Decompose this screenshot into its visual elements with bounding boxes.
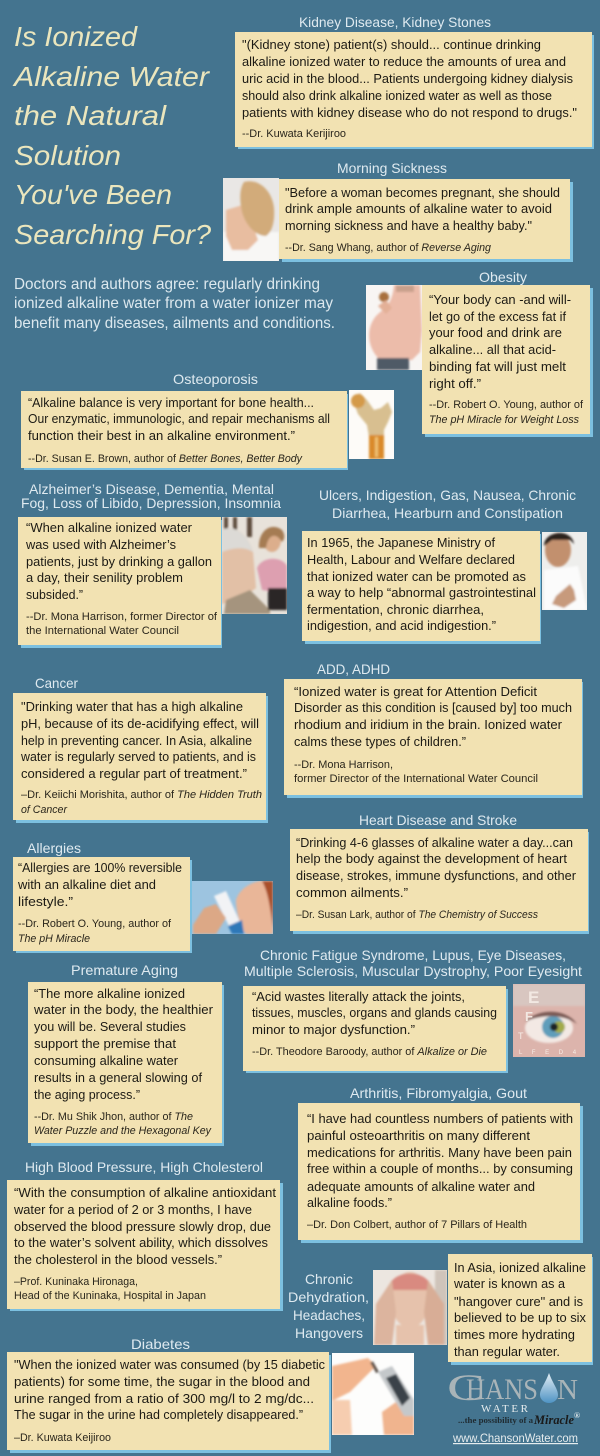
photo: woman with headache (373, 1270, 447, 1345)
logo: Chanson Water: WATER (481, 1403, 531, 1415)
photo: overweight man (366, 285, 422, 370)
quote: diabetes: "When the ionized water was consumed (by 15 diabetic (14, 1357, 325, 1372)
quote: chronic fatigue: minor to major dysfunction.” (252, 1022, 415, 1037)
quote: kidney disease: --Dr. Kuwata Kerijiroo (242, 128, 346, 140)
panel: osteoporosis (21, 371, 394, 470)
quote: premature aging: support the premise that (34, 1036, 176, 1051)
photo: eye with letter chart: E (528, 988, 539, 1007)
quote: heart disease: “Drinking 4-6 glasses of alkaline water a day...can (296, 835, 573, 850)
quote: diabetes: patients) for some time, the sugar in the blood and (14, 1374, 310, 1389)
heading: ulcers: Ulcers, Indigestion, Gas, Nausea, Chronic (319, 487, 576, 503)
heading: chronic dehydration: Chronic (305, 1271, 353, 1287)
quote: osteoporosis (28, 395, 330, 465)
panel: cancer (13, 675, 268, 823)
quote: ulcers: indigestion, and acid indigestion.” (307, 618, 496, 633)
quote: alzheimer's (25, 520, 218, 637)
quote: high blood pressure: to the water’s solvent ability, which dissolves (14, 1235, 268, 1250)
website link: www.ChansonWater.com (452, 1431, 578, 1445)
quote: high blood pressure (13, 1185, 276, 1302)
panel: premature aging (28, 962, 224, 1146)
quote: arthritis: painful osteoarthritis on many different (307, 1128, 530, 1143)
quote: ulcers (307, 535, 536, 633)
heading: ADD, ADHD: ADD, ADHD (317, 661, 390, 677)
quote: morning sickness (285, 185, 560, 254)
quote: osteoporosis: Our enzymatic, immunologic, and repair mechanisms all (28, 411, 330, 426)
title: Solution (14, 140, 121, 171)
quote: alzheimer's: the International Water Council (26, 625, 179, 637)
quote: premature aging: results in a general slowing of (34, 1070, 202, 1085)
panel: chronic fatigue (243, 947, 585, 1073)
panel: morning sickness (223, 160, 573, 262)
quote: high blood pressure: “With the consumption of alkaline antioxidant (14, 1185, 276, 1200)
heading: alzheimer's (21, 481, 281, 511)
heading: chronic dehydration: Dehydration, (288, 1289, 369, 1305)
quote: cancer: "Drinking water that has a high alkaline (21, 699, 243, 714)
logo: Chanson Water: C (447, 1368, 485, 1409)
quote: heart disease: –Dr. Susan Lark, author of The Chemistry of Success (296, 909, 538, 921)
heading: osteoporosis: Osteoporosis (173, 371, 258, 387)
quote: obesity (429, 292, 584, 426)
logo: Chanson Water: Miracle (533, 1412, 574, 1427)
quote: morning sickness: drink ample amounts of alkaline water to avoid (285, 201, 552, 216)
heading: obesity: Obesity (479, 269, 527, 285)
heading: alzheimer's: Alzheimer’s Disease, Dementia, Mental (29, 481, 274, 497)
title (12, 21, 211, 250)
quote: premature aging: --Dr. Mu Shik Jhon, author of The (34, 1111, 193, 1123)
quote: ADD, ADHD: rhodium and iridium in the brain. Ionized water (294, 717, 563, 732)
quote: ulcers: a way to help “abnormal gastrointestinal (307, 585, 536, 600)
heading: cancer: Cancer (35, 675, 78, 691)
intro text: Doctors and authors agree: regularly drinking (14, 276, 320, 293)
quote: morning sickness: "Before a woman becomes pregnant, she should (285, 185, 560, 200)
callout: hangover cure (453, 1260, 586, 1359)
photo: femur bone (349, 390, 394, 459)
icon: water drop (540, 1373, 558, 1403)
quote: high blood pressure: water for a period of 2 or 3 months, I have (13, 1202, 252, 1217)
panel: ulcers (302, 487, 587, 644)
quote: cancer: water is regularly served to patients, and is (20, 749, 256, 764)
panel: ADD, ADHD (284, 661, 583, 798)
heading: allergies: Allergies (27, 840, 81, 856)
quote: ADD, ADHD: calms these types of children.” (294, 734, 466, 749)
quote: osteoporosis: “Alkaline balance is very important for bone health... (28, 395, 314, 410)
quote: heart disease: common ailments.” (296, 885, 408, 900)
quote: osteoporosis: function their best in an alkaline environment.” (28, 428, 295, 443)
callout: hangover cure: than regular water. (454, 1344, 560, 1359)
quote: morning sickness: morning sickness and have a healthy baby." (285, 218, 532, 233)
quote: obesity: let go of the excess fat if (429, 309, 566, 324)
quote: alzheimer's: “When alkaline ionized water (26, 520, 193, 535)
heading: arthritis: Arthritis, Fibromyalgia, Gout (350, 1085, 527, 1101)
quote: alzheimer's: a day, their senility problem (26, 570, 183, 585)
quote: ulcers: In 1965, the Japanese Ministry of (307, 535, 495, 550)
quote: obesity: “Your body can -and will- (429, 292, 571, 307)
quote: cancer: of Cancer (21, 804, 68, 816)
title: Alkaline Water (12, 61, 211, 92)
quote: kidney disease: patients with kidney disease who do not respond to drugs." (242, 105, 577, 120)
quote: alzheimer's: --Dr. Mona Harrison, former Director of (26, 611, 218, 623)
callout: hangover cure: times more hydrating (454, 1327, 575, 1342)
photo: elderly man and woman (222, 517, 287, 614)
logo: Chanson Water: ...the possibility of a (458, 1416, 533, 1425)
quote: premature aging: consuming alkaline water (34, 1053, 179, 1068)
panel: arthritis (298, 1085, 583, 1243)
quote: premature aging: water in the body, the healthier (33, 1002, 214, 1017)
quote: arthritis: adequate amounts of alkaline water and (307, 1179, 535, 1194)
quote: chronic fatigue: “Acid wastes literally attack the joints, (252, 989, 465, 1004)
logo: Chanson Water (447, 1368, 580, 1427)
panel: diabetes (7, 1336, 414, 1453)
quote: ADD, ADHD: Disorder as this condition is [caused by] too much (294, 700, 572, 715)
photo: glucose meter (332, 1353, 414, 1435)
heading: morning sickness: Morning Sickness (337, 160, 447, 176)
panel: alzheimer's (18, 481, 287, 648)
quote: arthritis: –Dr. Don Colbert, author of 7 Pillars of Health (307, 1219, 527, 1231)
quote: heart disease (296, 835, 577, 921)
quote: arthritis: medications for arthritis. Many have been pain (307, 1145, 572, 1160)
intro text: benefit many diseases, ailments and conditions. (14, 315, 335, 332)
photo: eye with letter chart: L F E D 4 (519, 1050, 580, 1056)
quote: cancer: pH, because of its de-acidifying effect, will (21, 716, 259, 731)
quote: cancer: considered a regular part of treatment.” (21, 766, 247, 781)
quote: kidney disease: uric acid in the blood... Patients undergoing kidney dialysis (242, 71, 573, 86)
quote: ADD, ADHD: former Director of the International Water Council (294, 773, 538, 785)
quote: cancer: –Dr. Keiichi Morishita, author of The Hidden Truth (21, 789, 262, 801)
heading: high blood pressure: High Blood Pressure, High Cholesterol (25, 1159, 263, 1175)
callout: hangover cure: In Asia, ionized alkaline (454, 1260, 586, 1275)
photo: woman using inhaler (192, 880, 273, 934)
heading: chronic dehydration: Hangovers (295, 1325, 363, 1341)
callout: hangover cure: "hangover cure" and is (454, 1294, 583, 1309)
heading: diabetes: Diabetes (131, 1336, 190, 1352)
heading: ulcers: Diarrhea, Hearburn and Constipation (332, 505, 563, 521)
heading: chronic dehydration (288, 1271, 369, 1341)
quote: heart disease: help the body against the development of heart (296, 851, 567, 866)
quote: ulcers: Health, Labour and Welfare declared (307, 552, 515, 567)
quote: premature aging (33, 986, 214, 1137)
title: You've Been (14, 179, 172, 210)
quote: diabetes (14, 1357, 325, 1444)
quote: chronic fatigue: --Dr. Theodore Baroody, author of Alkalize or Die (252, 1046, 487, 1058)
quote: morning sickness: --Dr. Sang Whang, author of Reverse Aging (285, 242, 492, 254)
quote: chronic fatigue: tissues, muscles, organs and glands causing (252, 1005, 497, 1020)
quote: alzheimer's: patients, just by drinking a gallon (26, 554, 212, 569)
heading: chronic dehydration: Headaches, (293, 1307, 365, 1323)
quote: premature aging: the aging process.” (34, 1087, 140, 1102)
photo: eye with letter chart (513, 984, 585, 1057)
quote: ADD, ADHD (294, 684, 572, 785)
quote: kidney disease: "(Kidney stone) patient(s) should... continue drinking (242, 37, 541, 52)
logo: Chanson Water: N (557, 1375, 578, 1406)
title: Searching For? (14, 219, 211, 250)
quote: obesity: your food and drink are (429, 325, 562, 340)
title: the Natural (14, 100, 167, 131)
quote: cancer: help in preventing cancer. In Asia, alkaline (21, 733, 252, 748)
panel: high blood pressure (7, 1159, 283, 1311)
quote: obesity: right off.” (429, 376, 481, 391)
quote: ulcers: fermentation, chronic diarrhea, (307, 602, 484, 617)
heading: ulcers (319, 487, 576, 521)
quote: allergies: lifestyle.” (18, 894, 73, 909)
quote: alzheimer's: was used with Alzheimer’s (25, 537, 176, 552)
quote: diabetes: urine ranged from a ratio of 300 mg/l to 2 mg/dc... (14, 1391, 314, 1406)
quote: obesity: alkaline... all that acid- (429, 342, 556, 357)
quote: allergies: --Dr. Robert O. Young, author of (18, 918, 172, 930)
quote: kidney disease (242, 37, 577, 140)
heading: chronic fatigue: Multiple Sclerosis, Muscular Dystrophy, Poor Eyesight (244, 963, 582, 979)
quote: high blood pressure: the cholesterol in the blood vessels.” (14, 1252, 222, 1267)
quote: premature aging: you will be. Several studies (34, 1019, 186, 1034)
photo: woman with morning sickness (223, 178, 279, 262)
photo: eye with letter chart: F (525, 1009, 533, 1024)
quote: high blood pressure: –Prof. Kuninaka Hironaga, (14, 1276, 138, 1288)
panel: obesity (366, 269, 593, 437)
photo: man with stomach pain (542, 532, 587, 610)
quote: osteoporosis: --Dr. Susan E. Brown, author of Better Bones, Better Body (28, 453, 303, 465)
heading: alzheimer's: Fog, Loss of Libido, Depression, Insomnia (21, 495, 281, 511)
quote: arthritis: “I have had countless numbers of patients with (307, 1111, 573, 1126)
heading: chronic fatigue: Chronic Fatigue Syndrome, Lupus, Eye Diseases, (260, 947, 566, 963)
photo: eye with letter chart: T (518, 1031, 524, 1041)
quote: obesity: binding fat will just melt (429, 359, 566, 374)
logo: Chanson Water: HANS (466, 1373, 538, 1406)
quote: arthritis (307, 1111, 573, 1231)
quote: kidney disease: alkaline ionized water to reduce the amounts of urea and (242, 54, 566, 69)
quote: arthritis: alkaline foods.” (307, 1195, 392, 1210)
quote: ADD, ADHD: --Dr. Mona Harrison, (294, 759, 393, 771)
quote: premature aging: “The more alkaline ionized (34, 986, 185, 1001)
quote: heart disease: disease, strokes, immune dysfunctions, and other (296, 868, 577, 883)
panel: chronic dehydration (288, 1254, 593, 1365)
intro text (14, 276, 335, 332)
quote: allergies: The pH Miracle (18, 933, 90, 945)
quote: allergies: with an alkaline diet and (17, 877, 156, 892)
heading: chronic fatigue (244, 947, 582, 979)
quote: arthritis: free within a couple of months... by consuming (307, 1161, 573, 1176)
heading: premature aging: Premature Aging (71, 962, 178, 978)
panel: kidney disease (235, 14, 594, 149)
heading: kidney disease: Kidney Disease, Kidney Stones (299, 14, 491, 30)
quote: allergies (17, 860, 182, 945)
quote: obesity: The pH Miracle for Weight Loss (429, 414, 579, 426)
heading: heart disease: Heart Disease and Stroke (359, 812, 517, 828)
title: Is Ionized (14, 21, 138, 52)
quote: premature aging: Water Puzzle and the Hexagonal Key (34, 1125, 212, 1137)
quote: ADD, ADHD: “Ionized water is great for Attention Deficit (294, 684, 537, 699)
quote: ulcers: that ionized water can be promoted as (307, 569, 526, 584)
callout: hangover cure: water is known as a (453, 1276, 566, 1291)
quote: cancer (20, 699, 262, 816)
quote: chronic fatigue (252, 989, 497, 1058)
quote: diabetes: The sugar in the urine had completely disappeared.” (14, 1407, 303, 1422)
quote: high blood pressure: Head of the Kuninaka, Hospital in Japan (14, 1290, 206, 1302)
intro text: ionized alkaline water from a water ionizer may (14, 295, 333, 312)
quote: allergies: “Allergies are 100% reversible (18, 860, 182, 875)
quote: high blood pressure: observed the blood pressure slowly drop, due (14, 1219, 271, 1234)
quote: alzheimer's: subsided.” (26, 587, 83, 602)
quote: kidney disease: should also drink alkaline ionized water as well as those (242, 88, 552, 103)
panel: heart disease (290, 812, 589, 934)
logo: Chanson Water: ® (574, 1411, 580, 1420)
panel: allergies (13, 840, 273, 953)
callout: hangover cure: believed to be up to six (454, 1310, 586, 1325)
quote: diabetes: –Dr. Kuwata Keijiroo (14, 1432, 111, 1444)
quote: obesity: --Dr. Robert O. Young, author of (429, 399, 584, 411)
